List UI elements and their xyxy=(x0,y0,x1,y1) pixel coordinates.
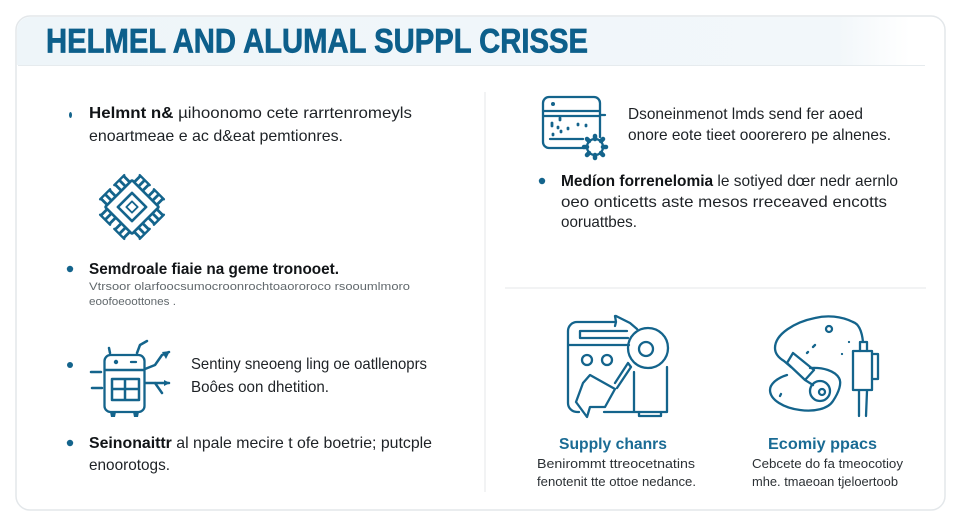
text block: right intro: Dsoneinmenot lmds send fer aoed xyxy=(628,106,863,123)
heading: supply chains: Supply chanrs xyxy=(559,436,667,453)
text block: median bullet xyxy=(539,173,898,231)
icon: economy impacts xyxy=(770,316,878,416)
text block: sentiny note: Boôes oon dhetition. xyxy=(191,379,329,396)
text block: first bullet: Helmnt n& µihoonomo cete rarrtenromeyls xyxy=(89,105,412,122)
title: HELMEL AND ALUMAL SUPPL CRISSE xyxy=(46,22,588,60)
text block: first bullet: enoartmeae e ac d&eat pemtionres. xyxy=(89,128,343,145)
text block: sentiny note: Sentiny sneoeng ling oe oatllenoprs xyxy=(191,356,427,373)
text block: semiconductor bullet: Semdroale fiaie na geme tronooet. xyxy=(89,261,339,278)
text block: last left bullet xyxy=(67,435,432,474)
text block: semiconductor bullet xyxy=(67,261,410,308)
text block: median bullet: oeo onticetts aste mesos rreceaved encotts xyxy=(561,194,887,211)
text block: semiconductor bullet: eoofoeoottones . xyxy=(89,296,176,308)
heading: economy impacts: Ecomiy ppacs xyxy=(768,436,877,453)
text block: median bullet: ooruattbes. xyxy=(561,214,637,231)
icon: browser window with gear xyxy=(543,97,606,158)
text block: supply chains detail xyxy=(537,457,696,489)
text block: right intro xyxy=(628,106,891,144)
text block: economy impacts detail: Cebcete do fa tmeocotioy xyxy=(752,457,904,471)
panel: header band xyxy=(17,17,910,65)
icon: device with arrows xyxy=(67,341,170,417)
text block: economy impacts detail xyxy=(752,457,904,489)
text block: right intro: onore eote tieet ooorerero pe alnenes. xyxy=(628,127,891,144)
icon: microchip xyxy=(92,167,172,247)
text block: economy impacts detail: mhe. tmaeoan tjeloertoob xyxy=(752,475,898,489)
icon: supply chains xyxy=(568,316,668,417)
text block: last left bullet: enoorotogs. xyxy=(89,457,170,474)
text block: semiconductor bullet: Vtrsoor olarfoocsumocroonrochtoaororoco rsooumlmoro xyxy=(89,281,410,293)
text block: sentiny note xyxy=(191,356,427,396)
text block: first bullet xyxy=(69,105,412,145)
text block: median bullet: Medíon forrenelomia le sotiyed dœr nedr aernlo xyxy=(561,173,898,190)
text block: supply chains detail: fenotenit tte ottoe nedance. xyxy=(537,475,696,489)
text block: last left bullet: Seinonaittr al npale mecire t ofe boetrie; putcple xyxy=(89,435,432,452)
text block: supply chains detail: Benirommt ttreocetnatins xyxy=(537,457,695,471)
